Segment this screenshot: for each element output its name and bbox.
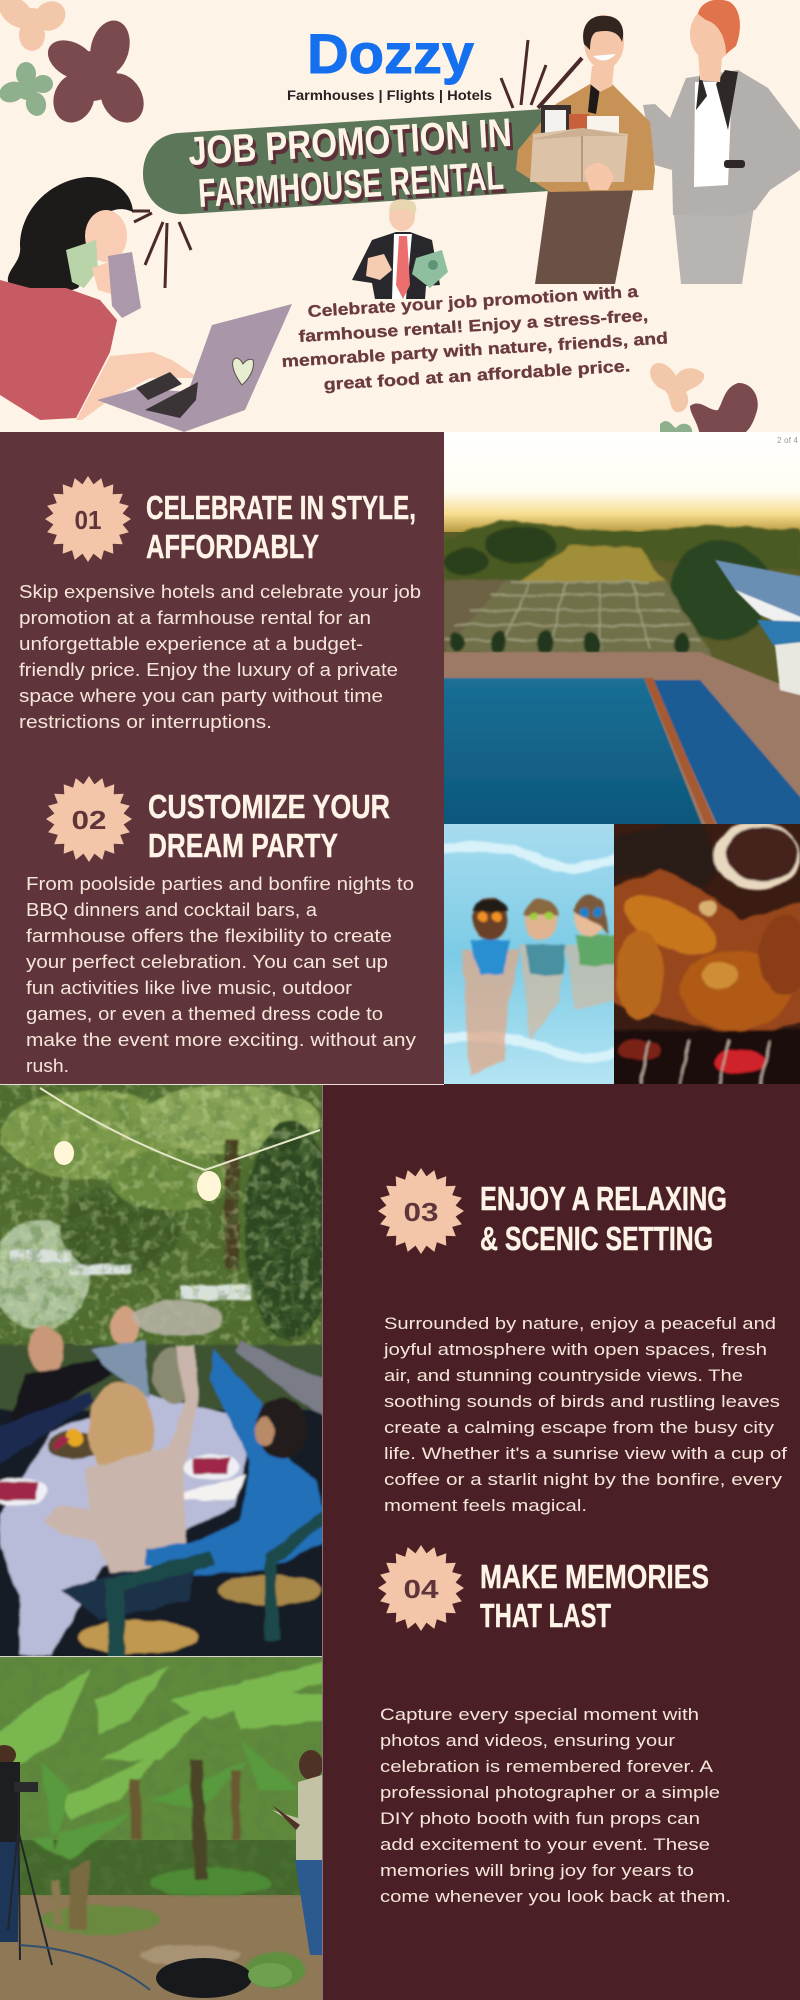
heading 03: & SCENIC SETTING (480, 1220, 713, 1257)
body 04: add excitement to your event. These (380, 1836, 710, 1854)
badge 03: 03 (404, 1197, 438, 1227)
heading 02: DREAM PARTY (148, 827, 338, 864)
badge 04 (378, 1545, 464, 1631)
heading 04 (480, 1558, 709, 1634)
badge 01: 01 (74, 505, 102, 535)
body 02: rush. (26, 1056, 69, 1076)
body 01: friendly price. Enjoy the luxury of a private (19, 660, 398, 680)
section 04 (378, 1545, 731, 1906)
intro text block: Celebrate your job promotion with a (307, 283, 640, 321)
section 03 (378, 1168, 788, 1515)
title text: JOB PROMOTION IN (187, 111, 513, 174)
body 03: soothing sounds of birds and rustling leaves (384, 1393, 780, 1411)
title text: JOB PROMOTION IN (190, 115, 516, 178)
body 01: Skip expensive hotels and celebrate your job (19, 582, 421, 602)
body 03: coffee or a starlit night by the bonfire, every (384, 1471, 783, 1489)
photo: photographer in banana plantation (0, 1657, 330, 2000)
body 04 (380, 1706, 731, 1906)
decoration: bottom-right floral blobs (650, 363, 758, 436)
man with tie (516, 15, 655, 284)
body 03: joyful atmosphere with open spaces, fresh (383, 1341, 767, 1359)
panel: header background (0, 0, 800, 433)
intro text block (281, 283, 669, 394)
body 02: games, or even a themed dress code to (26, 1004, 383, 1024)
photo frame and papers (541, 105, 619, 139)
decoration: top-left floral blobs (0, 0, 152, 131)
title text: FARMHOUSE RENTAL (197, 154, 505, 216)
heading 01 (146, 489, 416, 565)
laptop (97, 304, 292, 432)
illustration: two men with box (516, 0, 800, 284)
body 02: fun activities like live music, outdoor (26, 978, 352, 998)
panel: sections 01 and 02 background (0, 432, 444, 1084)
heading 03 (480, 1180, 727, 1257)
body 04: photos and videos, ensuring your (380, 1732, 676, 1750)
heading 03: ENJOY A RELAXING (480, 1180, 727, 1217)
body 01: restrictions or interruptions. (19, 712, 272, 732)
body 02: From poolside parties and bonfire nights to (26, 874, 414, 894)
body 03: life. Whether it's a sunrise view with a cup of (384, 1445, 788, 1463)
body 03: air, and stunning countryside views. The (384, 1367, 743, 1385)
title text (187, 111, 516, 220)
title text: FARMHOUSE RENTAL (200, 158, 508, 220)
section 02 (26, 776, 416, 1076)
badge 03 (378, 1168, 464, 1254)
panel: sections 03 and 04 background (322, 1084, 800, 2000)
photo: farmhouse with pool at sunrise (430, 432, 800, 840)
heading 02: CUSTOMIZE YOUR (148, 788, 390, 825)
photo: kids in swimming pool (444, 824, 614, 1084)
badge 01 (45, 476, 131, 562)
photo: friends toasting at outdoor dinner (0, 1085, 335, 1670)
rays near woman (132, 211, 191, 288)
icon: rays near man (501, 40, 582, 108)
body 02: make the event more exciting. without any (26, 1030, 416, 1050)
badge 02 (46, 776, 132, 862)
body 02: your perfect celebration. You can set up (26, 952, 388, 972)
body 02: farmhouse offers the flexibility to create (26, 926, 392, 946)
body 04: celebration is remembered forever. A (380, 1758, 713, 1776)
heading 02 (148, 788, 390, 864)
heading 04: MAKE MEMORIES (480, 1558, 709, 1595)
intro text block: farmhouse rental! Enjoy a stress-free, (298, 307, 649, 346)
body 04: come whenever you look back at them. (380, 1888, 731, 1906)
body 03: Surrounded by nature, enjoy a peaceful and (384, 1315, 776, 1333)
heading 01: CELEBRATE IN STYLE, (146, 489, 416, 526)
photo: barbecue chicken on grill (605, 815, 800, 1090)
heart (233, 358, 253, 385)
badge 04: 04 (404, 1574, 439, 1604)
body 01: promotion at a farmhouse rental for an (19, 608, 371, 628)
body 02: BBQ dinners and cocktail bars, a (26, 900, 318, 920)
intro text block: great food at an affordable price. (323, 357, 631, 394)
body 01: unforgettable experience at a budget- (19, 634, 363, 654)
body 04: memories will bring joy for years to (380, 1862, 694, 1880)
body 02 (26, 874, 416, 1076)
body 04: DIY photo booth with fun props can (380, 1810, 700, 1828)
section 01 (19, 476, 421, 732)
cardboard box (528, 128, 628, 190)
tagline: Farmhouses | Flights | Hotels (287, 87, 492, 103)
page marker: 2 of 4 (777, 436, 799, 445)
body 04: professional photographer or a simple (380, 1784, 720, 1802)
heading 04: THAT LAST (480, 1597, 611, 1634)
heading 01: AFFORDABLY (146, 528, 319, 565)
body 03: create a calming escape from the busy city (384, 1419, 775, 1437)
body 04: Capture every special moment with (380, 1706, 699, 1724)
illustration: businessman with cash (352, 199, 448, 299)
logo: Dozzy: Dozzy (307, 22, 474, 85)
man in grey suit (643, 0, 800, 284)
body 01 (19, 582, 421, 732)
body 03 (383, 1315, 788, 1515)
illustration: woman at laptop (0, 177, 292, 432)
body 03: moment feels magical. (384, 1497, 587, 1515)
body 01: space where you can party without time (19, 686, 383, 706)
title banner (143, 108, 566, 220)
intro text block: memorable party with nature, friends, and (281, 329, 669, 371)
badge 02: 02 (72, 805, 106, 835)
